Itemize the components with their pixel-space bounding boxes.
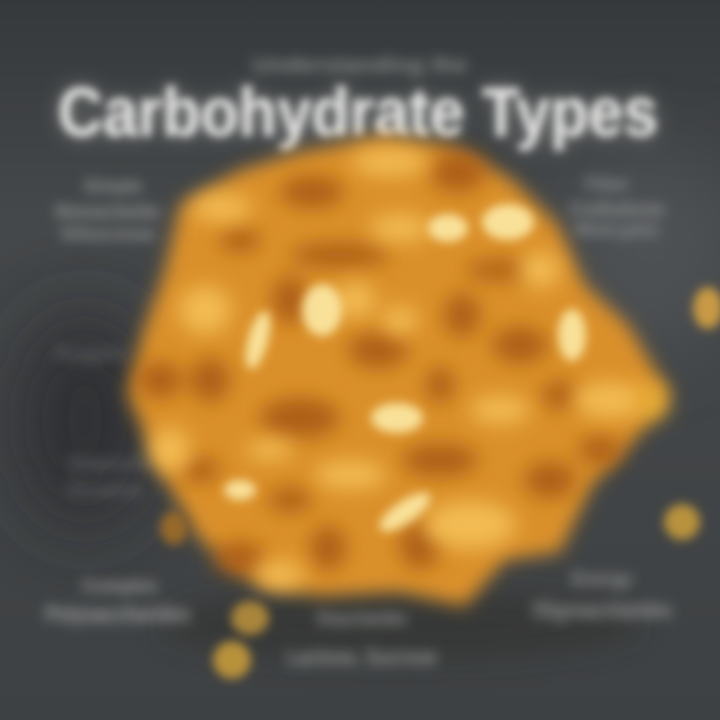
label: top left: Simple [83, 176, 143, 196]
label: top left [56, 176, 160, 244]
label: top left: Glucose [60, 224, 156, 244]
label: bottom right: Energy [571, 569, 633, 589]
label: top right: Whole grains [574, 220, 660, 240]
golden patches [150, 148, 646, 589]
yellow tip lower right [636, 384, 668, 420]
label: bottom left [46, 576, 190, 628]
label: bottom left: Polysaccharides [46, 601, 190, 628]
crumb left [160, 511, 188, 545]
label: middle left upper: Sugars [54, 343, 130, 365]
label: bottom centre: Lactose, Sucrose [287, 644, 437, 671]
food pile: golden carbohydrate mass [128, 136, 668, 606]
label: middle left lower [68, 453, 148, 500]
crumbs [160, 287, 720, 679]
darker orange patches [138, 152, 622, 574]
label: top right: Fiber [585, 174, 629, 194]
label: middle left lower: Grains [68, 480, 142, 500]
crumb lower right [664, 504, 700, 540]
label: middle left lower: Starch [68, 453, 148, 475]
label: bottom centre: Disaccharides [317, 608, 407, 630]
label: top left: Monosaccharides [56, 201, 160, 223]
label: top right [570, 174, 664, 240]
crumb right [693, 287, 720, 329]
label: bottom centre [287, 608, 437, 671]
pile silhouette [128, 136, 668, 606]
title: Carbohydrate Types [58, 73, 658, 151]
subtitle: Understanding the [252, 54, 468, 77]
label: bottom left: Complex [82, 576, 158, 596]
crumb bottom [231, 601, 269, 635]
title: Carbohydrate Types [58, 73, 658, 151]
crumb bottom lower [213, 641, 251, 679]
bright highlights [224, 204, 586, 538]
label: top right: Cellulose [570, 199, 664, 221]
label: bottom right [532, 569, 672, 624]
